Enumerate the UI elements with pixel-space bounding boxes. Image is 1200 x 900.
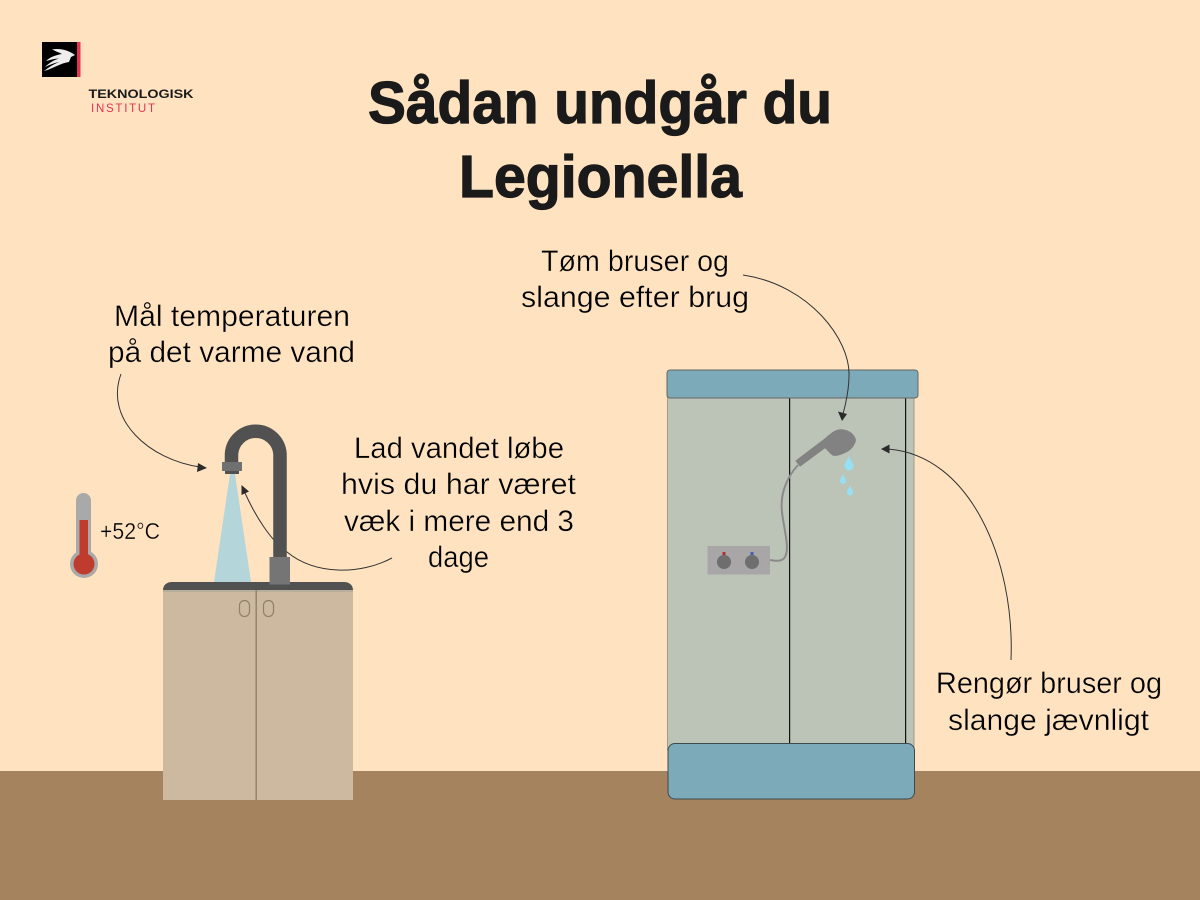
text: clean shower: Rengør bruser og	[936, 667, 1162, 700]
shower cabin	[667, 370, 918, 799]
shower roof	[667, 370, 918, 398]
logo: Teknologisk Institut: TEKNOLOGISK	[88, 89, 194, 101]
text: run the water: Lad vandet løbe	[354, 432, 564, 465]
arrow: run water to faucet	[242, 485, 392, 570]
title	[368, 70, 832, 210]
text: clean shower	[936, 667, 1162, 737]
logo: Teknologisk Institut	[42, 42, 194, 115]
countertop	[163, 582, 353, 590]
thermometer icon	[70, 493, 98, 578]
water stream	[214, 474, 251, 582]
text: run the water: dage	[428, 541, 489, 574]
water drops	[840, 456, 854, 496]
text: run the water: hvis du har været	[341, 468, 577, 501]
text: measure temperature: på det varme vand	[108, 336, 355, 369]
arrow: empty shower	[743, 275, 849, 421]
temperature label: +52°C	[100, 518, 160, 544]
arrow: clean shower	[881, 444, 1011, 660]
shower head	[795, 429, 856, 467]
text: empty shower	[521, 245, 749, 314]
mixer panel	[708, 546, 770, 574]
arrow: measure temperature	[117, 374, 207, 472]
title: Sådan undgår du	[368, 70, 832, 136]
logo: Teknologisk Institut: INSTITUT	[91, 103, 155, 115]
shower hose	[770, 465, 798, 561]
text: clean shower: slange jævnligt	[948, 704, 1150, 737]
text: empty shower: slange efter brug	[521, 281, 749, 314]
text: run the water: væk i mere end 3	[344, 505, 574, 538]
faucet	[222, 431, 290, 584]
text: measure temperature: Mål temperaturen	[114, 300, 350, 333]
text: run the water	[341, 432, 577, 574]
kitchen cabinet	[163, 589, 353, 800]
text: empty shower: Tøm bruser og	[541, 245, 729, 278]
title: Legionella	[459, 144, 743, 210]
text: measure temperature	[108, 300, 355, 369]
shower base	[668, 744, 914, 799]
ground	[0, 771, 1200, 900]
